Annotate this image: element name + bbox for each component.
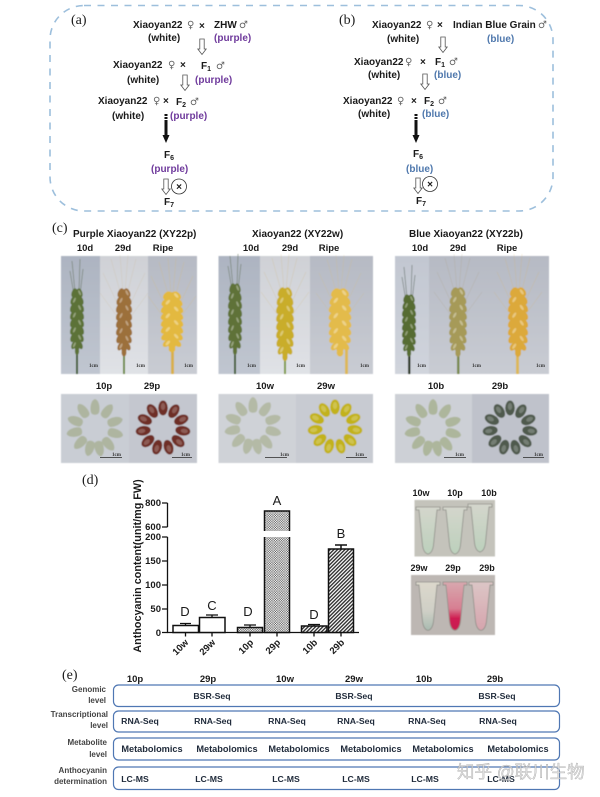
generation 2: ♀ bbox=[168, 60, 175, 71]
generation F6: 6 bbox=[419, 154, 423, 161]
panel b: blue cross scheme bbox=[339, 13, 547, 208]
generation 3: 2 bbox=[182, 102, 186, 109]
grain scale bars: 1cm bbox=[534, 453, 544, 458]
omics sample headers: 10p bbox=[127, 674, 143, 685]
arrow: selfing bbox=[162, 179, 170, 194]
x tick labels: 29w bbox=[198, 637, 219, 658]
generation 1: ♀ bbox=[426, 20, 433, 31]
omics sample headers: 29w bbox=[345, 674, 364, 685]
generation 2: (white) bbox=[127, 75, 159, 86]
heading: Purple Xiaoyan22 (XY22p) bbox=[73, 229, 196, 240]
grain stage labels bbox=[428, 381, 508, 392]
generation 2: ♂ bbox=[449, 57, 458, 68]
generation 2: 1 bbox=[207, 66, 211, 73]
row: genomic level: BSR-Seq bbox=[335, 691, 373, 701]
generation 2: Xiaoyan22 bbox=[354, 57, 404, 68]
y tick labels: 50 bbox=[150, 604, 161, 615]
scale bars bbox=[247, 364, 370, 369]
axes and ticks bbox=[162, 503, 359, 636]
heading: Blue Xiaoyan22 (XY22b) bbox=[409, 229, 523, 240]
generation F7: F bbox=[416, 196, 422, 207]
tube labels bottom: 29p bbox=[445, 563, 461, 573]
tube labels bottom bbox=[410, 563, 495, 573]
generation 1 bbox=[372, 20, 547, 45]
generation 3: (purple) bbox=[170, 111, 207, 122]
generation 3: ♀ bbox=[153, 96, 160, 107]
generation 2: F bbox=[435, 57, 441, 68]
photo: grains bbox=[395, 394, 549, 463]
grain stage labels: 10w bbox=[256, 381, 275, 392]
arrow: backcross black bbox=[412, 114, 420, 143]
row: genomic level: level bbox=[88, 696, 106, 705]
generation 1: Indian Blue Grain bbox=[453, 20, 536, 31]
generation 2 bbox=[113, 60, 232, 86]
y tick labels: 150 bbox=[145, 556, 161, 567]
row: anthocyanin determination: LC-MS bbox=[272, 774, 300, 784]
panel: crossing schemes dashed frame bbox=[50, 6, 553, 211]
spike stage labels: 10d bbox=[77, 243, 93, 254]
grain stage labels: 29w bbox=[317, 381, 336, 392]
grain scale bars bbox=[100, 453, 192, 458]
generation 1: Xiaoyan22 bbox=[133, 20, 183, 31]
generation 3: F bbox=[424, 96, 430, 107]
row: metabolite level bbox=[67, 738, 560, 760]
row: transcriptional level: RNA-Seq bbox=[479, 716, 517, 726]
row: genomic level bbox=[72, 685, 560, 706]
arrow: F2 cross bbox=[421, 74, 429, 90]
generation 3 bbox=[343, 96, 449, 120]
icon: selfing circle: × bbox=[176, 182, 182, 193]
icon: selfing circle bbox=[422, 176, 438, 192]
generation 2: × bbox=[180, 60, 186, 71]
scale bars: 1cm bbox=[184, 364, 194, 369]
label: (a): (a) bbox=[71, 13, 87, 28]
significance letters: B bbox=[337, 526, 345, 541]
photo: grains bbox=[61, 394, 197, 463]
scale bars: 1cm bbox=[247, 364, 257, 369]
omics sample headers: 29p bbox=[200, 674, 216, 685]
generation 2 bbox=[354, 57, 461, 81]
row: transcriptional level: RNA-Seq bbox=[408, 716, 446, 726]
y tick labels: 800 bbox=[145, 498, 161, 509]
scale bars bbox=[417, 364, 546, 369]
grain scale bars: 1cm bbox=[181, 453, 191, 458]
arrow: F1 cross bbox=[439, 37, 447, 52]
generation 3: ♂ bbox=[438, 96, 447, 107]
row: genomic level: BSR-Seq bbox=[478, 691, 516, 701]
panel a: purple cross scheme bbox=[71, 13, 251, 209]
scale bars: 1cm bbox=[417, 364, 427, 369]
arrow: selfing bbox=[414, 178, 422, 194]
x tick labels: 29p bbox=[264, 637, 283, 657]
generation 3: ♀ bbox=[397, 96, 404, 107]
grain stage labels: 29b bbox=[492, 381, 508, 392]
generation 3: Xiaoyan22 bbox=[343, 96, 393, 107]
row: anthocyanin determination: LC-MS bbox=[487, 774, 515, 784]
generation F7: 7 bbox=[170, 202, 174, 209]
generation 1: × bbox=[437, 20, 443, 31]
y axis title: Anthocyanin content(unit/mg FW) bbox=[132, 479, 144, 653]
spike stage labels: 29d bbox=[282, 243, 298, 254]
generation F6: 6 bbox=[170, 155, 174, 162]
spike stage labels bbox=[412, 243, 517, 254]
generation 3: × bbox=[411, 96, 417, 107]
panel: extract tube photos bbox=[410, 488, 497, 635]
scale bars: 1cm bbox=[536, 364, 546, 369]
significance letters bbox=[180, 493, 345, 622]
generation 3: (blue) bbox=[422, 109, 449, 120]
spike stage labels bbox=[77, 243, 173, 254]
x tick labels: 10w bbox=[171, 637, 192, 658]
generation F6: F bbox=[413, 149, 419, 160]
generation 1: ♀ bbox=[187, 20, 194, 31]
row: transcriptional level: level bbox=[90, 721, 108, 730]
scale bars: 1cm bbox=[136, 364, 146, 369]
spike stage labels: Ripe bbox=[153, 243, 173, 254]
row: anthocyanin determination: Anthocyanin bbox=[59, 766, 107, 775]
photo: 29-day tubes bbox=[411, 575, 495, 635]
heading: Xiaoyan22 (XY22w) bbox=[252, 229, 343, 240]
photo: spikes bbox=[395, 254, 549, 374]
scale bars: 1cm bbox=[360, 364, 370, 369]
panel: purple Xiaoyan22 photos bbox=[61, 229, 197, 463]
grain scale bars: 1cm bbox=[280, 453, 290, 458]
row: metabolite level: Metabolomics bbox=[268, 744, 330, 754]
x tick labels: 10b bbox=[301, 637, 320, 657]
generation 3: (white) bbox=[112, 111, 144, 122]
grain scale bars: 1cm bbox=[355, 453, 365, 458]
generation 3: × bbox=[163, 96, 169, 107]
grain stage labels: 29p bbox=[144, 381, 160, 392]
row: metabolite level: level bbox=[89, 750, 107, 759]
row: genomic level: BSR-Seq bbox=[193, 691, 231, 701]
grain stage labels: 10p bbox=[96, 381, 112, 392]
generation F6: F bbox=[164, 150, 170, 161]
generation 1: ♂ bbox=[538, 20, 547, 31]
spike stage labels: Ripe bbox=[497, 243, 517, 254]
significance letters: D bbox=[309, 607, 319, 622]
tube labels top bbox=[412, 488, 497, 498]
tube labels top: 10w bbox=[412, 488, 431, 498]
generation 2: Xiaoyan22 bbox=[113, 60, 163, 71]
y tick labels: 0 bbox=[156, 628, 161, 639]
spike stage labels: 29d bbox=[450, 243, 466, 254]
panel: blue Xiaoyan22 photos bbox=[395, 229, 549, 463]
bar: 29b bbox=[328, 545, 354, 632]
generation F6: (blue) bbox=[406, 164, 433, 175]
watermark: 知乎 @联川生物 bbox=[457, 762, 585, 782]
bar: 10p bbox=[238, 625, 262, 632]
grain stage labels bbox=[256, 381, 336, 392]
row: anthocyanin determination bbox=[54, 766, 560, 790]
generation 1 bbox=[133, 20, 251, 44]
generation 3: (white) bbox=[358, 109, 390, 120]
y tick labels: 600 bbox=[145, 522, 161, 533]
row: metabolite level: Metabolite bbox=[67, 738, 108, 747]
row: metabolite level: Metabolomics bbox=[340, 744, 402, 754]
scale bars: 1cm bbox=[472, 364, 482, 369]
generation 2: (white) bbox=[368, 70, 400, 81]
omics sample headers bbox=[127, 674, 503, 685]
significance letters: C bbox=[207, 598, 217, 613]
x tick labels: 10p bbox=[237, 637, 256, 657]
grain stage labels bbox=[96, 381, 160, 392]
row: anthocyanin determination: LC-MS bbox=[195, 774, 223, 784]
label: (d): (d) bbox=[82, 473, 99, 488]
spike stage labels: 10d bbox=[412, 243, 428, 254]
grain scale bars bbox=[265, 453, 367, 458]
icon: selfing circle bbox=[172, 179, 186, 194]
bar: 10w bbox=[173, 624, 198, 632]
row: anthocyanin determination: LC-MS bbox=[121, 774, 149, 784]
generation F7: F bbox=[164, 197, 170, 208]
spike stage labels bbox=[243, 243, 339, 254]
omics sample headers: 29b bbox=[487, 674, 503, 685]
label: (e): (e) bbox=[62, 668, 78, 683]
generation 1: (purple) bbox=[214, 33, 251, 44]
tube labels bottom: 29b bbox=[479, 563, 495, 573]
generation 2: (purple) bbox=[195, 75, 232, 86]
grain scale bars: 1cm bbox=[455, 453, 465, 458]
generation 3: Xiaoyan22 bbox=[98, 96, 148, 107]
generation 1: (blue) bbox=[487, 34, 514, 45]
arrow: F2 cross bbox=[181, 75, 189, 90]
grain scale bars: 1cm bbox=[112, 453, 122, 458]
significance letters: D bbox=[180, 604, 190, 619]
row: metabolite level: Metabolomics bbox=[121, 744, 183, 754]
icon: selfing circle: × bbox=[427, 180, 433, 190]
grain scale bars bbox=[444, 453, 544, 458]
generation 1: × bbox=[199, 21, 205, 32]
generation F6 bbox=[151, 150, 188, 175]
tube labels top: 10b bbox=[481, 488, 497, 498]
generation 2: 1 bbox=[441, 62, 445, 69]
arrow: F1 cross bbox=[198, 39, 206, 54]
row: anthocyanin determination: LC-MS bbox=[411, 774, 439, 784]
grain stage labels: 10b bbox=[428, 381, 444, 392]
photo: grains bbox=[218, 394, 373, 463]
generation 3: ♂ bbox=[190, 97, 199, 108]
row: metabolite level: Metabolomics bbox=[196, 744, 258, 754]
row: metabolite level: Metabolomics bbox=[412, 744, 474, 754]
label: (c): (c) bbox=[52, 221, 68, 236]
generation 1: (white) bbox=[387, 34, 419, 45]
row: transcriptional level: Transcriptional bbox=[51, 710, 108, 719]
x tick labels: 29b bbox=[328, 637, 347, 657]
photo: spikes bbox=[218, 254, 373, 374]
scale bars: 1cm bbox=[89, 364, 99, 369]
spike stage labels: Ripe bbox=[319, 243, 339, 254]
generation 2: ♂ bbox=[216, 61, 225, 72]
bar: 10b bbox=[302, 624, 327, 632]
scale bars bbox=[89, 364, 194, 369]
row: anthocyanin determination: determination bbox=[54, 777, 107, 786]
bar chart: anthocyanin content bbox=[132, 479, 359, 658]
generation 2: × bbox=[420, 57, 426, 68]
generation F6 bbox=[406, 149, 433, 175]
spike stage labels: 10d bbox=[243, 243, 259, 254]
label: (b): (b) bbox=[339, 13, 356, 28]
omics sample headers: 10b bbox=[416, 674, 432, 685]
arrow: backcross black bbox=[162, 114, 170, 143]
generation 1: ♂ bbox=[239, 20, 248, 31]
x tick labels bbox=[171, 637, 347, 658]
photo: spikes bbox=[61, 255, 197, 374]
omics sample headers: 10w bbox=[276, 674, 295, 685]
panel: white Xiaoyan22 photos bbox=[218, 229, 373, 463]
scale bars: 1cm bbox=[296, 364, 306, 369]
generation 1: ZHW bbox=[214, 20, 237, 31]
bar: 29p broken bbox=[262, 511, 292, 632]
row: anthocyanin determination: LC-MS bbox=[342, 774, 370, 784]
row: transcriptional level: RNA-Seq bbox=[194, 716, 232, 726]
generation 3: F bbox=[176, 97, 182, 108]
generation 1: Xiaoyan22 bbox=[372, 20, 422, 31]
row: transcriptional level: RNA-Seq bbox=[121, 716, 159, 726]
bar: 29w bbox=[200, 615, 225, 632]
tube labels top: 10p bbox=[447, 488, 463, 498]
spike stage labels: 29d bbox=[115, 243, 131, 254]
generation F6: (purple) bbox=[151, 164, 188, 175]
row: transcriptional level: RNA-Seq bbox=[337, 716, 375, 726]
row: transcriptional level bbox=[51, 710, 560, 732]
row: metabolite level: Metabolomics bbox=[487, 744, 549, 754]
generation 2: ♀ bbox=[405, 57, 412, 68]
generation F7: 7 bbox=[422, 201, 426, 208]
generation 1: (white) bbox=[148, 33, 180, 44]
generation 3 bbox=[98, 96, 207, 122]
row: transcriptional level: RNA-Seq bbox=[268, 716, 306, 726]
y tick labels: 200 bbox=[145, 532, 161, 543]
generation 3: 2 bbox=[430, 101, 434, 108]
row: genomic level: Genomic bbox=[72, 685, 107, 694]
generation 2: F bbox=[201, 61, 207, 72]
photo: 10-day tubes bbox=[414, 500, 495, 556]
generation 2: (blue) bbox=[434, 70, 461, 81]
y tick labels bbox=[145, 498, 161, 639]
y tick labels: 100 bbox=[145, 580, 161, 591]
significance letters: D bbox=[243, 604, 253, 619]
tube labels bottom: 29w bbox=[410, 563, 429, 573]
significance letters: A bbox=[273, 493, 282, 508]
